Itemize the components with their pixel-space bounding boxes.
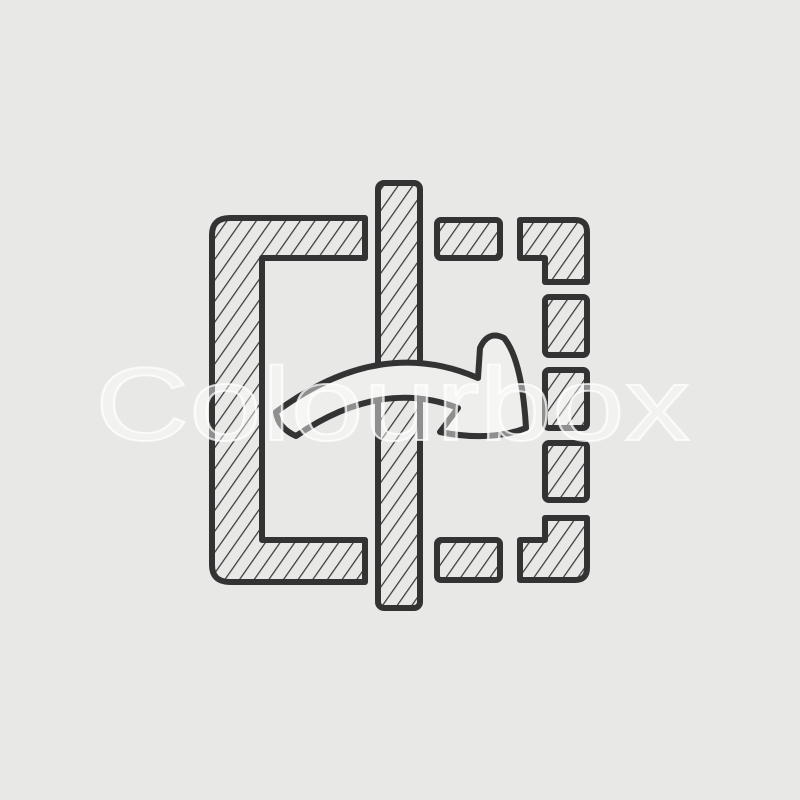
left bracket — [212, 218, 365, 582]
arrow — [276, 336, 526, 436]
watermark: Colourbox — [95, 347, 690, 463]
vertical bar — [378, 183, 420, 608]
dashed outline: mirrored copy — [437, 220, 587, 580]
